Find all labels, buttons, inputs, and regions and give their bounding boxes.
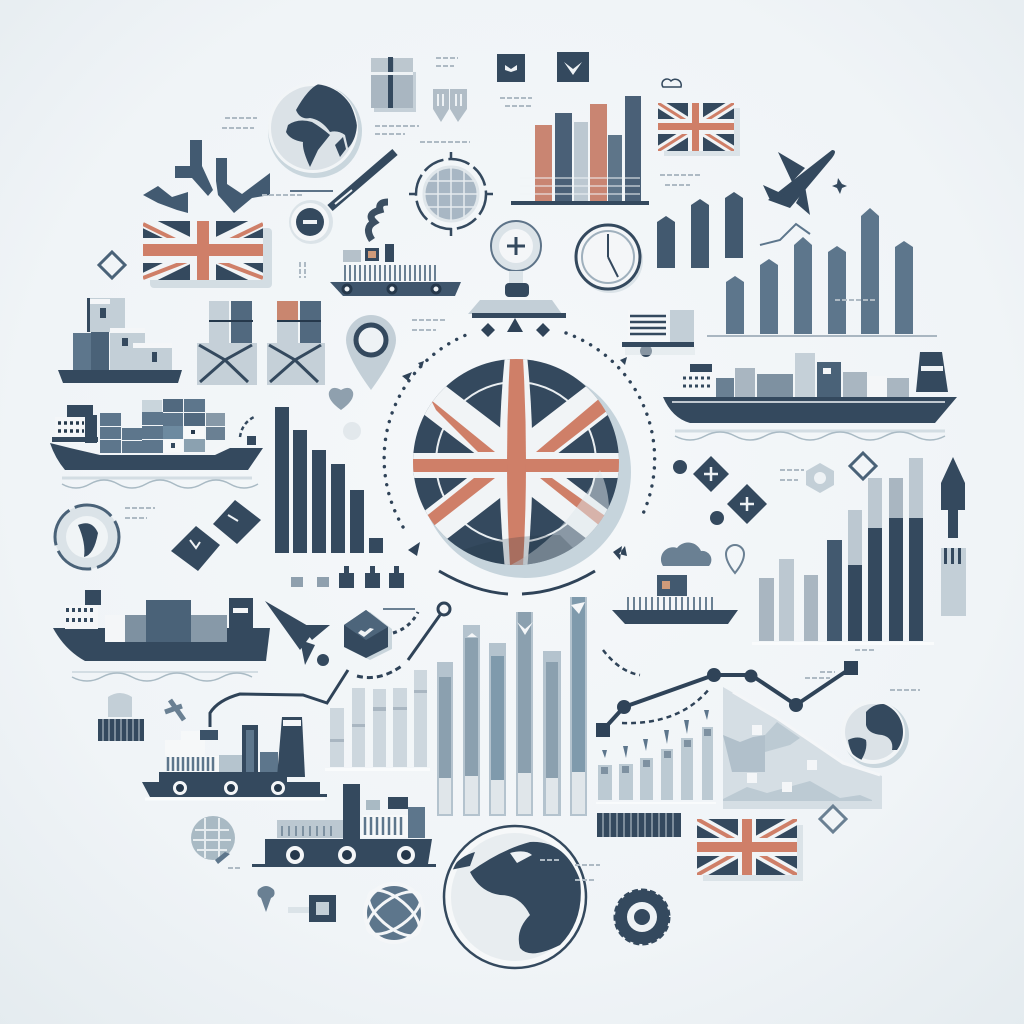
truck lower left [142, 717, 327, 799]
right line chart [596, 650, 858, 737]
right stacked bar chart [752, 458, 934, 645]
large globe bottom [444, 826, 586, 968]
flag: upper left [143, 221, 272, 288]
tilted badges [171, 500, 261, 571]
clock [576, 225, 643, 293]
map [723, 687, 882, 809]
mottled globe [191, 816, 235, 864]
globe: top left [268, 83, 362, 178]
upper right arrow bars [657, 192, 937, 336]
container strip [597, 813, 681, 837]
scale instrument [468, 221, 566, 318]
arrows cluster upper left [143, 140, 270, 213]
dotted orbit ring [384, 318, 655, 594]
small cargo ship top centre [330, 202, 461, 296]
cargo ship left lower [53, 590, 270, 681]
small cross icon [165, 700, 184, 720]
top bar chart [511, 96, 649, 205]
gear icon [615, 890, 669, 944]
rocket [265, 601, 330, 666]
small bars [596, 710, 716, 804]
location pin [346, 315, 396, 390]
small bottom badges [99, 252, 846, 922]
icon: dark square badges [497, 52, 589, 82]
decorative text lines [125, 58, 920, 900]
hexagon and diamond badges [806, 453, 876, 493]
small cloud icon [662, 79, 681, 87]
truck lower centre [252, 784, 436, 867]
parcel [371, 57, 416, 112]
large cargo ship left [50, 399, 263, 488]
small people icons row [291, 566, 404, 588]
flag: upper right [658, 103, 740, 156]
central globe with union flag [410, 355, 631, 578]
magnifier [289, 152, 395, 244]
left stacked crates [58, 298, 182, 383]
large cargo ship right [663, 352, 957, 440]
descending bar chart [275, 407, 383, 553]
route line [210, 603, 450, 727]
delivery truck right [622, 310, 695, 357]
tall translucent bars [325, 597, 587, 816]
flag: lower right [697, 819, 803, 881]
shield icons [433, 89, 467, 122]
cube [344, 610, 392, 660]
small globe bottom [361, 882, 427, 944]
plus badges [673, 456, 767, 525]
cloud and pin icons [661, 542, 744, 573]
small container left [98, 693, 144, 741]
folding crate panels [197, 301, 325, 385]
plane [763, 150, 847, 215]
small globe left [55, 505, 119, 569]
globe: right [845, 704, 909, 768]
heart and small icons [329, 388, 361, 440]
medium cargo ship centre [612, 575, 738, 624]
upward arrow with column [941, 457, 966, 616]
wire globe target [409, 152, 493, 236]
